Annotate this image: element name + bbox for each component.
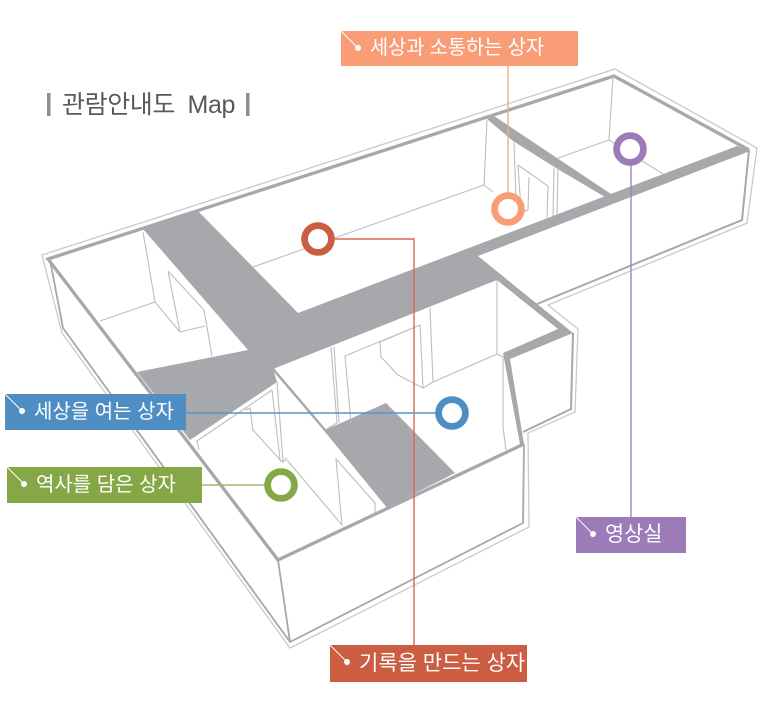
corridor floors [143, 146, 750, 444]
label: orange [341, 31, 578, 66]
main walls [48, 76, 749, 642]
interior lines [100, 77, 663, 525]
marker: green [268, 472, 294, 498]
leader lines [186, 66, 631, 645]
label: orange: 세상과 소통하는 상자 [370, 37, 544, 59]
title: 관람안내도 Map [62, 91, 235, 119]
label: purple [576, 517, 686, 553]
label: blue [5, 394, 186, 430]
label: red [330, 645, 527, 682]
marker: blue [439, 400, 465, 426]
label: red: 기록을 만드는 상자 [359, 652, 525, 675]
label: purple: 영상실 [605, 523, 662, 546]
label: blue: 세상을 여는 상자 [34, 400, 174, 423]
floor plan [42, 69, 757, 648]
label: green: 역사를 담은 상자 [36, 473, 176, 496]
outer outline [42, 69, 757, 648]
marker: purple [617, 136, 643, 162]
marker: orange [495, 196, 521, 222]
marker: red [305, 226, 331, 252]
label: green [7, 467, 202, 503]
